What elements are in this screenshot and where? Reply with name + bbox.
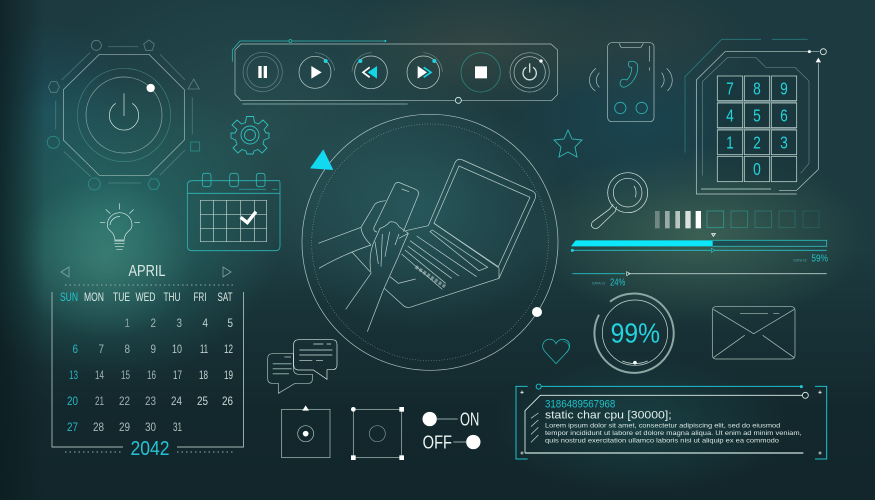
panel: keypad: 0 <box>753 159 761 179</box>
central circle with hands and laptop <box>302 114 558 370</box>
panel: keypad: 2 <box>753 133 761 153</box>
icon: star <box>554 130 582 157</box>
progress bar: 59%: 59% <box>811 254 828 265</box>
date grid: 30 <box>145 420 156 434</box>
panel: monthly calendar <box>52 263 244 460</box>
code heading: static char cpu [30000]; <box>545 410 672 422</box>
date grid: 29 <box>119 420 130 434</box>
panel: code text block <box>516 384 827 459</box>
year: 2042 <box>130 438 170 460</box>
on and off toggles <box>422 409 480 452</box>
weekday headers: MON <box>84 290 104 304</box>
status bars and empty cells <box>655 211 819 228</box>
body text: tempor incididunt ut labore et dolore magna aliqua. Ut enim ad minim veniam, <box>545 430 802 437</box>
panel: media controls <box>232 39 558 104</box>
progress bar: 59% <box>571 234 828 265</box>
target control <box>282 405 330 458</box>
date grid: 18 <box>199 368 208 382</box>
date grid: 9 <box>150 342 156 356</box>
date grid: 12 <box>224 342 233 356</box>
weekday headers <box>60 290 233 304</box>
weekday headers: THU <box>164 290 180 304</box>
cyan triangle <box>310 149 333 170</box>
date grid: 20 <box>67 394 78 408</box>
fast forward button <box>407 53 442 89</box>
date grid: 11 <box>200 342 208 356</box>
icon: gear <box>231 116 269 154</box>
date grid: 3 <box>176 316 182 330</box>
date grid: 7 <box>98 342 104 356</box>
date grid: 2 <box>150 316 156 330</box>
date grid: 8 <box>124 342 130 356</box>
pause button <box>243 52 282 92</box>
on and off toggles: ON <box>460 409 479 430</box>
date grid: 17 <box>173 368 182 382</box>
progress line: 24% <box>572 272 827 288</box>
icon: speech bubbles <box>268 340 337 393</box>
icon: magnifier <box>591 173 648 229</box>
date grid: 4 <box>202 316 208 330</box>
date grid <box>67 316 233 434</box>
power dial <box>47 40 200 190</box>
panel: keypad: 5 <box>753 106 761 126</box>
date grid: 10 <box>172 342 182 356</box>
panel: keypad: 4 <box>726 106 734 126</box>
date grid: 25 <box>197 394 208 408</box>
date grid: 24 <box>171 394 182 408</box>
date grid: 21 <box>95 394 104 408</box>
weekday headers: SUN <box>60 290 78 304</box>
hands holding phone <box>318 182 419 332</box>
previous and next arrows <box>61 267 231 277</box>
icon: phone call <box>589 43 672 122</box>
panel: keypad: 6 <box>780 106 788 126</box>
date grid: 13 <box>69 368 78 382</box>
progress line: 24%: 24% <box>610 277 625 288</box>
date grid: 28 <box>93 420 104 434</box>
panel: keypad: 8 <box>753 79 761 99</box>
icon: calendar with check <box>187 173 280 251</box>
body text: quis nostrud exercitation ullamco laboris nisi ut aliquip ex ea commodo <box>545 437 779 444</box>
panel: keypad: 1 <box>726 133 734 153</box>
date grid: 15 <box>121 368 130 382</box>
selection frame control <box>351 407 404 460</box>
body text <box>545 423 802 444</box>
icon: heart <box>543 339 570 364</box>
panel: keypad <box>685 39 826 194</box>
date grid: 19 <box>224 368 233 382</box>
icon: envelope <box>712 307 795 359</box>
date grid: 1 <box>124 316 130 330</box>
date grid: 6 <box>72 342 78 356</box>
weekday headers: WED <box>136 290 156 304</box>
progress bar: 59%: DATA 02 <box>793 258 807 262</box>
body text: Lorem ipsum dolor sit amet, consectetur adipiscing elit, sed do eiusmod <box>545 423 781 430</box>
weekday headers: TUE <box>113 290 130 304</box>
date grid: 26 <box>222 394 233 408</box>
weekday headers: FRI <box>194 290 206 304</box>
code number: 3186489567968 <box>545 399 615 411</box>
date grid: 22 <box>119 394 130 408</box>
date grid: 16 <box>147 368 156 382</box>
panel: keypad: 9 <box>780 79 788 99</box>
date grid: 14 <box>95 368 104 382</box>
date grid: 23 <box>145 394 156 408</box>
stop button <box>461 53 500 92</box>
on and off toggles: OFF <box>423 431 452 452</box>
date grid: 5 <box>228 316 233 330</box>
power button <box>510 53 549 92</box>
white marker <box>532 307 542 317</box>
rewind button <box>352 53 387 89</box>
icon: light bulb <box>100 203 140 249</box>
play button <box>299 53 335 88</box>
month heading: APRIL <box>128 263 166 280</box>
weekday headers: SAT <box>218 290 233 304</box>
date grid: 27 <box>67 420 78 434</box>
laptop <box>384 159 536 307</box>
gauge: 99% <box>594 294 674 373</box>
date grid: 31 <box>173 420 182 434</box>
progress line: 24%: DATA 01 <box>592 282 605 286</box>
panel: keypad: 7 <box>726 79 734 99</box>
panel: keypad: 3 <box>780 133 788 153</box>
gauge: 99%: 99% <box>611 318 660 349</box>
